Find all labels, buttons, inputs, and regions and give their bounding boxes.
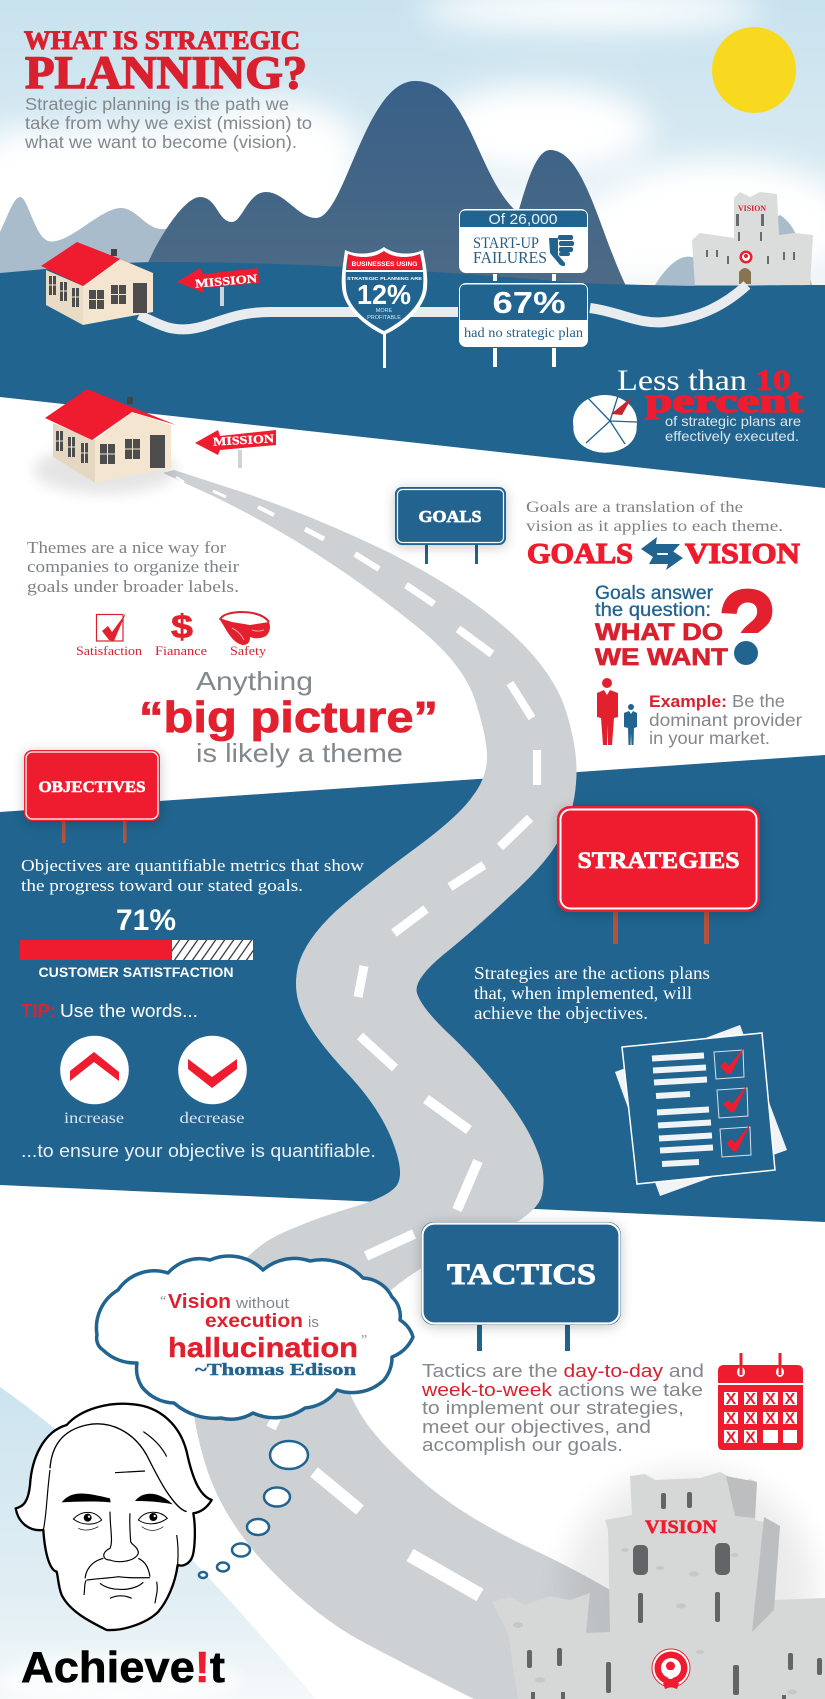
sign: start-up failures: Of 26,000 — [488, 211, 558, 228]
text: strategies definition: achieve the objectives. — [474, 1003, 648, 1023]
callout: thought cloud quote: hallucination — [168, 1332, 358, 1363]
callout: thought cloud quote: ” — [361, 1333, 367, 1348]
icon: tall and short people — [597, 678, 637, 745]
icon: calendar: X — [726, 1410, 737, 1428]
text: quantifiable note: ...to ensure your objective is quantifiable. — [21, 1140, 376, 1161]
logo: Achieve!t — [21, 1643, 225, 1692]
panel: blue band top — [0, 262, 825, 488]
callout: what do we want: WE WANT — [595, 644, 728, 671]
illustration: Edison portrait — [16, 1404, 212, 1630]
text: tactics definition: meet our objectives, and — [422, 1417, 651, 1437]
callout: less than 10 percent: Less than — [617, 364, 747, 397]
icon: increase — [60, 1036, 129, 1127]
icon: calendar: X — [765, 1410, 776, 1428]
text: objectives definition: the progress toward our stated goals. — [21, 876, 303, 895]
goals and vision exchange — [527, 537, 800, 570]
panel: bottom-left sky — [0, 1387, 316, 1699]
text: tip: TIP: — [21, 1000, 56, 1021]
theme icons: Fianance — [155, 643, 207, 658]
theme icons: Safety — [230, 643, 267, 658]
icon: house one — [41, 242, 156, 325]
theme icons: Satisfaction — [76, 643, 143, 658]
castle label: VISION — [738, 204, 766, 213]
icon: calendar: X — [785, 1391, 796, 1408]
goals and vision exchange: VISION — [685, 538, 800, 570]
text: goals definition: vision as it applies to each theme. — [526, 518, 783, 535]
text: strategies definition — [474, 963, 710, 1023]
title block — [24, 25, 312, 152]
text: example: Be the — [732, 691, 785, 711]
text: objectives definition: Objectives are quantifiable metrics that show — [21, 856, 364, 875]
theme icons — [76, 608, 270, 658]
chart: customer satisfaction progress bar: CUSTOMER SATISTFACTION — [38, 965, 234, 980]
icon: calendar: X — [765, 1391, 776, 1408]
castle door — [739, 268, 751, 284]
text: example: in your market. — [649, 728, 770, 748]
dark mountains — [147, 81, 628, 290]
icon: calendar: X — [726, 1391, 737, 1408]
callout: thought cloud quote — [96, 1256, 413, 1419]
sign: goals — [395, 487, 506, 564]
text: goals definition: Goals are a translation of the — [526, 499, 743, 516]
sign: tactics — [421, 1222, 621, 1351]
icon: satisfaction checkbox — [96, 613, 126, 641]
castle target — [740, 250, 752, 264]
sign: shield statistic: BUSINESSES USING — [352, 261, 418, 268]
icon: calendar — [718, 1353, 803, 1450]
text: strategies definition: that, when implemented, will — [474, 983, 692, 1003]
sign: start-up failures — [459, 209, 588, 281]
text: big picture: Anything — [196, 666, 313, 696]
text: tactics definition — [421, 1361, 704, 1455]
text: themes intro: companies to organize their — [27, 557, 240, 576]
callout: less than 10 percent: percent — [645, 383, 804, 420]
icon: calendar: X — [726, 1430, 737, 1446]
title line two: PLANNING? — [25, 47, 307, 99]
sign: mission two — [195, 430, 276, 468]
sign: tactics: TACTICS — [447, 1258, 596, 1291]
intro text: take from why we exist (mission) to — [25, 113, 312, 133]
small castle — [692, 192, 813, 287]
icon: calendar: X — [745, 1391, 756, 1408]
icon: question mark: ? — [718, 567, 777, 688]
text: themes intro: Themes are a nice way for — [27, 538, 227, 557]
text: big picture: “big picture” — [139, 693, 438, 742]
icon: decrease — [178, 1036, 247, 1127]
callout: less than 10 percent: of strategic plans are — [665, 413, 801, 429]
sign: start-up failures: FAILURES — [473, 248, 547, 267]
text: tactics definition: Tactics are the day-to-day and — [422, 1361, 704, 1381]
sign: mission one — [177, 268, 259, 306]
panel: blue section objectives and strategies — [0, 755, 825, 1222]
icon: exchange arrows — [641, 537, 683, 570]
callout: thought cloud quote: “ — [160, 1294, 166, 1309]
sign: goals: GOALS — [418, 507, 482, 526]
sign: 67 percent — [459, 283, 588, 367]
text: example — [649, 691, 802, 748]
text: themes intro — [27, 538, 240, 596]
light mountains — [0, 197, 812, 290]
sign: start-up failures: START-UP — [473, 235, 539, 252]
icon: calendar: X — [785, 1410, 796, 1428]
icon: thumbs down — [549, 235, 574, 266]
sign: strategies: STRATEGIES — [578, 848, 740, 873]
illustration: vision castle — [492, 1470, 825, 1699]
goals and vision exchange: GOALS — [527, 538, 633, 570]
thought bubbles — [199, 1441, 308, 1578]
sign: objectives — [24, 750, 160, 843]
callout: thought cloud quote: execution — [205, 1311, 303, 1332]
text: big picture: is likely a theme — [196, 738, 403, 768]
sign: shield statistic — [342, 247, 427, 368]
text: objectives definition — [21, 856, 364, 895]
icon: finance dollar: $ — [171, 608, 193, 645]
text: goals definition — [526, 499, 783, 535]
icon: pie chart — [573, 395, 637, 453]
intro text — [24, 94, 312, 152]
icon: checklist document — [615, 1025, 787, 1196]
callout: what do we want: Goals answer — [595, 583, 714, 604]
icon: decrease: decrease — [180, 1110, 244, 1127]
chart: customer satisfaction progress bar — [20, 904, 253, 980]
castle label: VISION — [645, 1517, 717, 1538]
text: big picture — [139, 666, 438, 768]
callout: what do we want: the question: — [595, 600, 711, 621]
text: strategies definition: Strategies are the actions plans — [474, 963, 710, 983]
sign: objectives: OBJECTIVES — [38, 779, 146, 796]
sign: shield statistic: 12% — [357, 279, 411, 310]
callout: thought cloud quote: is — [308, 1314, 319, 1331]
callout: thought cloud quote: without — [235, 1295, 290, 1312]
callout: less than 10 percent: 10 — [755, 364, 791, 397]
text: tactics definition: week-to-week actions we take — [421, 1380, 703, 1400]
sign: 67 percent: 67% — [492, 285, 566, 320]
intro text: Strategic planning is the path we — [25, 94, 289, 114]
sign: shield statistic: STRATEGIC PLANNING ARE — [347, 276, 423, 282]
path: mission to vision trail — [139, 285, 747, 329]
castle target — [652, 1649, 690, 1689]
callout: thought cloud quote: Vision — [168, 1291, 231, 1313]
text: tip: Use the words... — [60, 1000, 198, 1021]
icon: calendar: X — [745, 1430, 756, 1446]
intro text: what we want to become (vision). — [24, 132, 297, 152]
text: tactics definition: accomplish our goals. — [422, 1435, 623, 1455]
road — [163, 470, 780, 1699]
text: example: dominant provider — [649, 710, 802, 730]
text: tactics definition: to implement our strategies, — [422, 1398, 684, 1418]
icon: house two — [33, 389, 177, 494]
text: example: Example: — [649, 692, 727, 711]
title line one: WHAT IS STRATEGIC — [24, 25, 300, 55]
sign: 67 percent: had no strategic plan — [464, 326, 583, 341]
icon: safety goggles — [219, 612, 270, 645]
icon: increase: increase — [64, 1110, 124, 1127]
chart: customer satisfaction progress bar: 71% — [116, 904, 176, 937]
panel: sky background — [0, 0, 825, 300]
callout: less than 10 percent: effectively executed. — [665, 428, 799, 444]
callout: what do we want — [595, 567, 777, 688]
sign: mission two: MISSION — [213, 431, 275, 449]
sign: mission one: MISSION — [195, 271, 258, 291]
callout: thought cloud quote: ~Thomas Edison — [195, 1360, 357, 1379]
icon: sun — [712, 27, 796, 113]
icon: calendar: X — [745, 1410, 756, 1428]
text: themes intro: goals under broader labels. — [27, 577, 239, 596]
callout: less than 10 percent — [573, 364, 804, 453]
sign: shield statistic: PROFITABLE — [367, 315, 401, 321]
callout: what do we want: WHAT DO — [595, 619, 723, 646]
sign: shield statistic: MORE — [376, 308, 393, 314]
sign: strategies — [557, 806, 760, 944]
